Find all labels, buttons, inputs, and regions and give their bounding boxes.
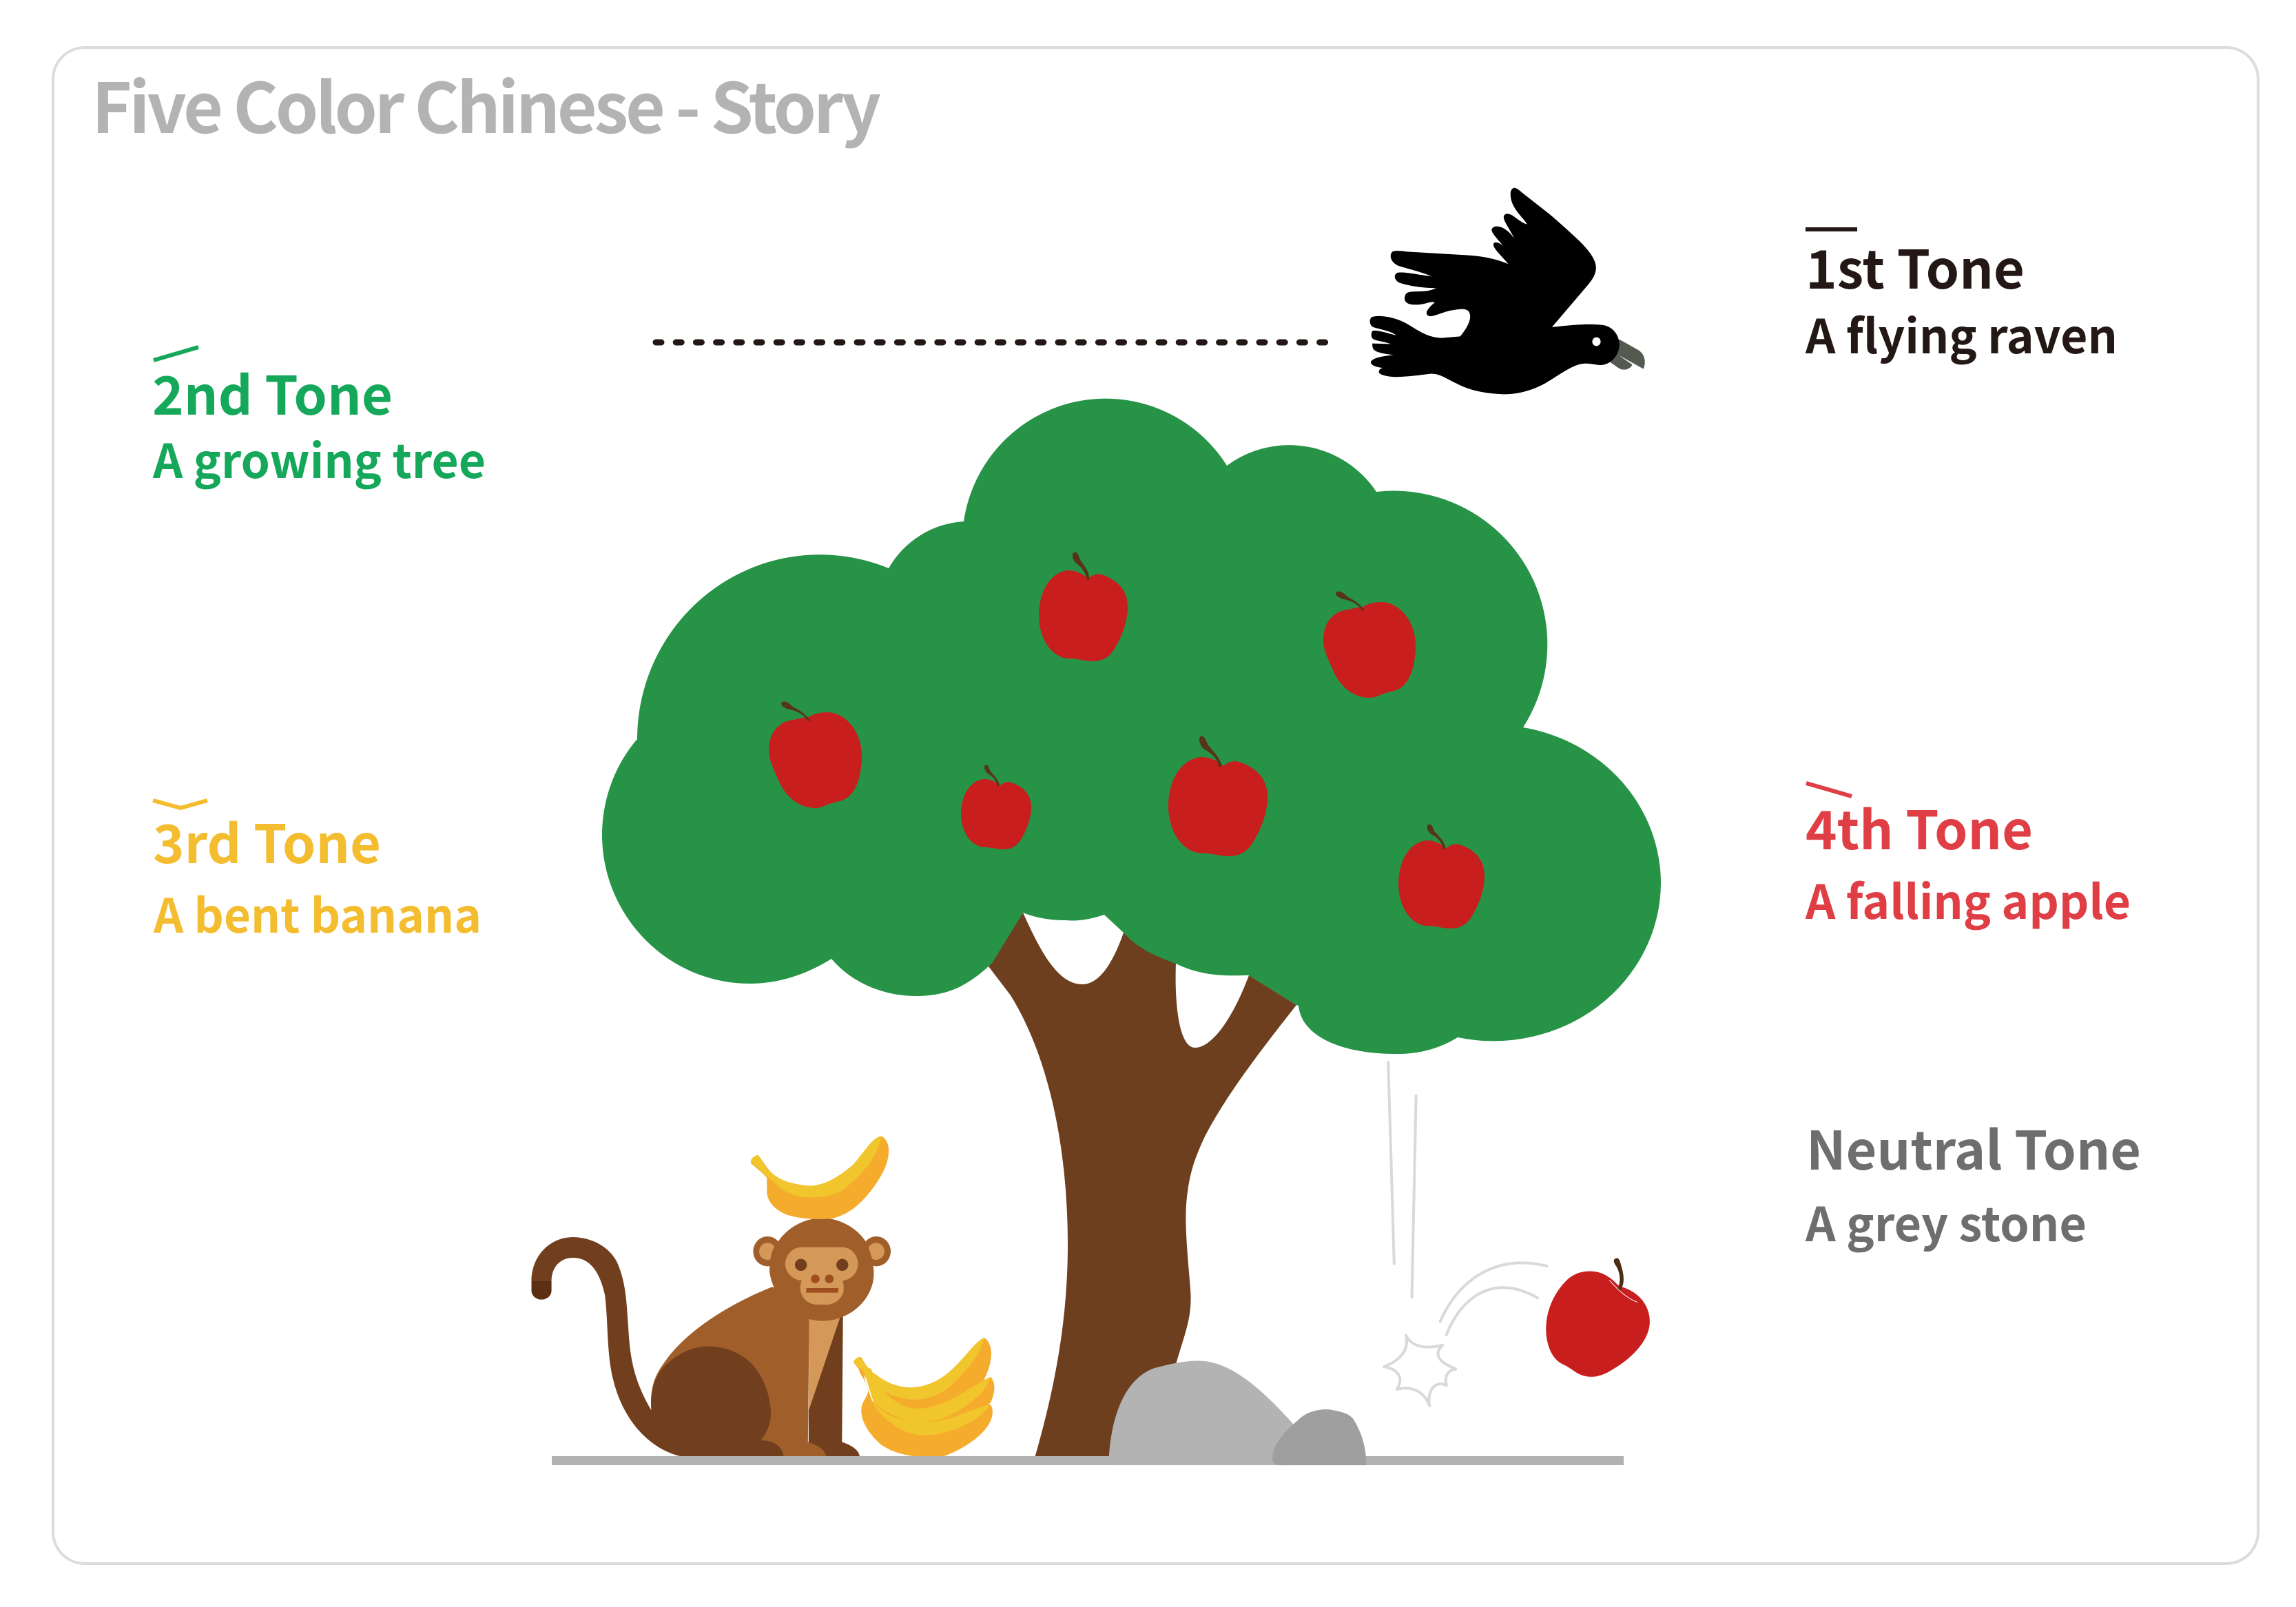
heading: 3rd Tone: 3rd Tone — [153, 802, 381, 879]
monkey chest — [809, 1317, 840, 1411]
caption: A bent banana: A bent banana — [153, 878, 482, 946]
small grey stone — [1272, 1409, 1366, 1465]
apple on tree: left — [769, 701, 862, 808]
impact splash — [1384, 1336, 1456, 1406]
monkey head — [753, 1218, 891, 1321]
flight path: dotted line — [656, 339, 1327, 346]
motion lines — [1388, 1062, 1547, 1335]
tree — [602, 399, 1661, 1460]
large grey stone — [1109, 1361, 1294, 1465]
banana bunch — [854, 1338, 994, 1456]
apple on tree: large centre — [1168, 736, 1268, 856]
legend: 2nd tone — [152, 347, 486, 492]
tone mark: rising line — [154, 347, 198, 360]
legend: 1st tone — [1805, 227, 2118, 367]
title: Five Color Chinese - Story — [92, 53, 881, 153]
tree canopy — [602, 399, 1661, 1054]
tone mark: dipping line — [153, 800, 207, 808]
monkey with bananas — [532, 1136, 994, 1456]
caption: A falling apple: A falling apple — [1805, 864, 2131, 933]
caption: A grey stone: A grey stone — [1805, 1187, 2087, 1255]
tree trunk — [989, 913, 1296, 1460]
raven eye — [1592, 338, 1601, 346]
falling apple scene — [1109, 1062, 1650, 1465]
monkey far leg — [809, 1317, 860, 1456]
raven body — [1370, 188, 1620, 394]
fallen apple — [1546, 1258, 1650, 1377]
caption: A flying raven: A flying raven — [1805, 299, 2118, 367]
tone mark: flat bar — [1806, 227, 1857, 231]
apple on tree: small centre — [961, 765, 1031, 849]
apple on tree: top centre — [1039, 552, 1128, 661]
heading: 1st Tone: 1st Tone — [1806, 228, 2025, 304]
icon: flying raven — [1370, 188, 1645, 394]
monkey body — [651, 1287, 827, 1456]
monkey tail — [532, 1237, 696, 1456]
legend: neutral tone — [1805, 1109, 2141, 1255]
apple on tree: lower right — [1398, 825, 1485, 929]
heading: Neutral Tone: Neutral Tone — [1806, 1109, 2141, 1185]
heading: 4th Tone: 4th Tone — [1806, 789, 2033, 865]
caption: A growing tree: A growing tree — [152, 424, 486, 492]
tone mark: falling line — [1806, 783, 1852, 796]
legend: 3rd tone — [153, 800, 482, 946]
legend: 4th tone — [1805, 783, 2131, 933]
heading: 2nd Tone: 2nd Tone — [152, 354, 393, 431]
apple on tree: top right — [1323, 591, 1416, 698]
monkey thigh — [651, 1347, 783, 1456]
banana on head — [751, 1136, 889, 1219]
raven beak — [1610, 340, 1645, 370]
ground line — [552, 1456, 1624, 1465]
